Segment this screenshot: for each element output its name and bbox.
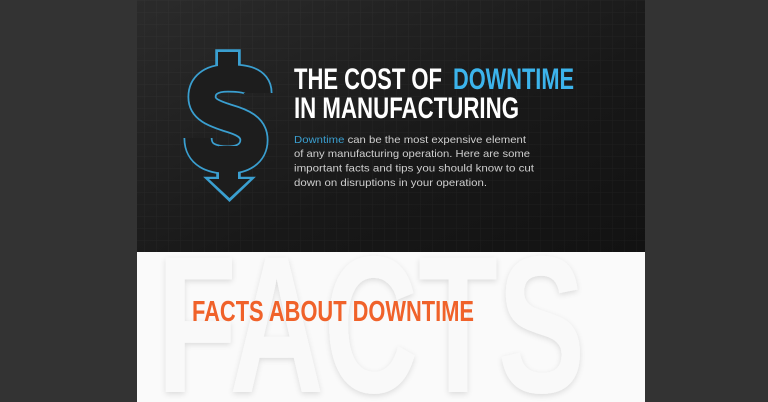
text block: intro: of any manufacturing operation. Here are some — [294, 148, 530, 160]
text block: intro — [294, 134, 534, 189]
text block: intro: important facts and tips you should know to cut — [294, 162, 534, 174]
title: THE COST OF — [294, 63, 442, 96]
title — [294, 63, 574, 125]
panel: header — [137, 0, 645, 252]
panel: facts — [137, 252, 645, 402]
title: DOWNTIME — [453, 63, 574, 96]
icon: dollar sign with down arrow — [198, 50, 258, 201]
heading: facts about downtime: FACTS ABOUT DOWNTIME — [192, 296, 474, 328]
title: IN MANUFACTURING — [294, 92, 519, 125]
text block: intro: down on disruptions in your operation. — [294, 177, 487, 189]
text block: intro: Downtime can be the most expensive element — [294, 134, 526, 146]
